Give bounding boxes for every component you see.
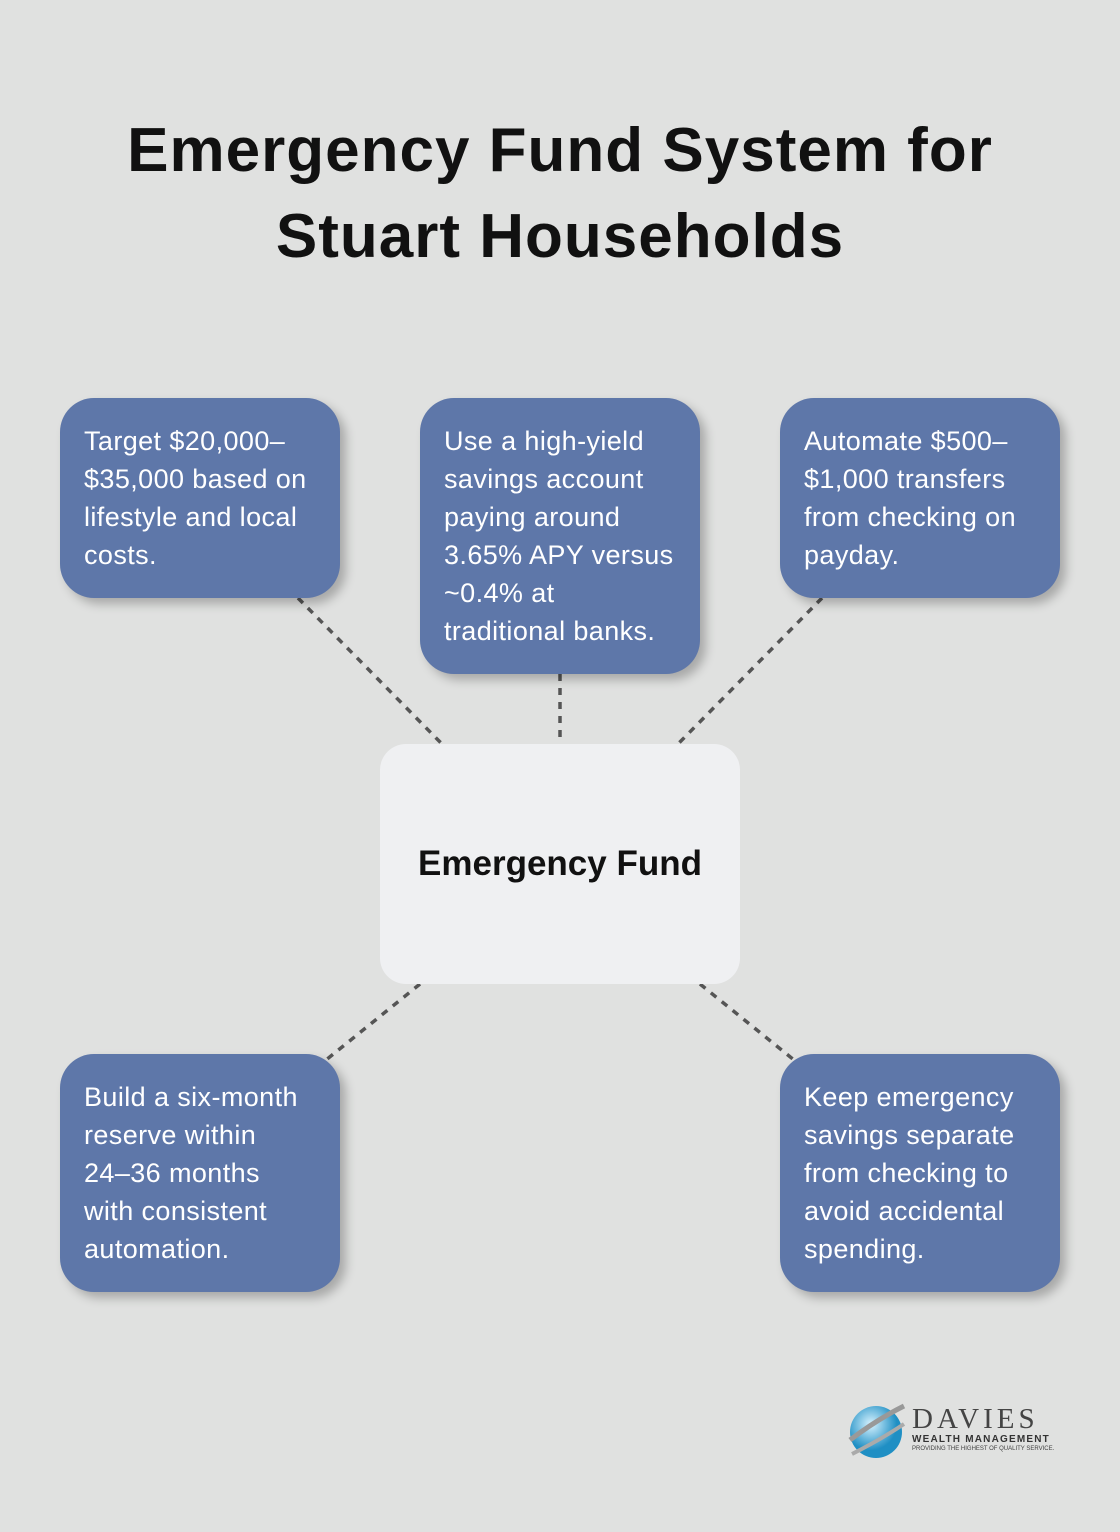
box: automate <box>780 398 1060 598</box>
box: separate: Keep emergency <box>804 1082 1014 1112</box>
box: high-yield: ~0.4% at <box>444 578 555 608</box>
center: emergency fund: Emergency Fund <box>418 844 702 883</box>
box: six-month: Build a six-month <box>84 1082 298 1112</box>
box: separate: from checking to <box>804 1158 1008 1188</box>
box: separate: spending. <box>804 1234 925 1264</box>
box: target <box>60 398 340 598</box>
center: emergency fund <box>380 744 740 984</box>
box: separate: avoid accidental <box>804 1196 1004 1226</box>
box: high-yield: 3.65% APY versus <box>444 540 674 570</box>
box: high-yield: Use a high-yield <box>444 426 644 456</box>
box: high-yield: traditional banks. <box>444 616 655 646</box>
box: six-month: automation. <box>84 1234 230 1264</box>
box: high-yield: paying around <box>444 502 620 532</box>
box: six-month: 24–36 months <box>84 1158 260 1188</box>
box: six-month <box>60 1054 340 1292</box>
box: automate: $1,000 transfers <box>804 464 1006 494</box>
box: automate: payday. <box>804 540 899 570</box>
logo: DAVIES <box>912 1403 1039 1435</box>
box: automate: Automate $500– <box>804 426 1008 456</box>
logo: PROVIDING THE HIGHEST OF QUALITY SERVICE. <box>912 1446 1054 1452</box>
box: six-month: reserve within <box>84 1120 256 1150</box>
logo: WEALTH MANAGEMENT <box>912 1434 1050 1445</box>
box: target: costs. <box>84 540 157 570</box>
box: target: lifestyle and local <box>84 502 297 532</box>
logo <box>848 1403 1054 1458</box>
icon: globe <box>848 1404 905 1458</box>
box: target: $35,000 based on <box>84 464 307 494</box>
title: Emergency Fund System for <box>127 116 993 185</box>
title: Stuart Households <box>276 202 844 271</box>
box: separate: savings separate <box>804 1120 1015 1150</box>
box: separate <box>780 1054 1060 1292</box>
box: six-month: with consistent <box>84 1196 267 1226</box>
title <box>127 116 993 271</box>
box: automate: from checking on <box>804 502 1016 532</box>
box: target: Target $20,000– <box>84 426 285 456</box>
box: high-yield <box>420 398 700 674</box>
box: high-yield: savings account <box>444 464 644 494</box>
